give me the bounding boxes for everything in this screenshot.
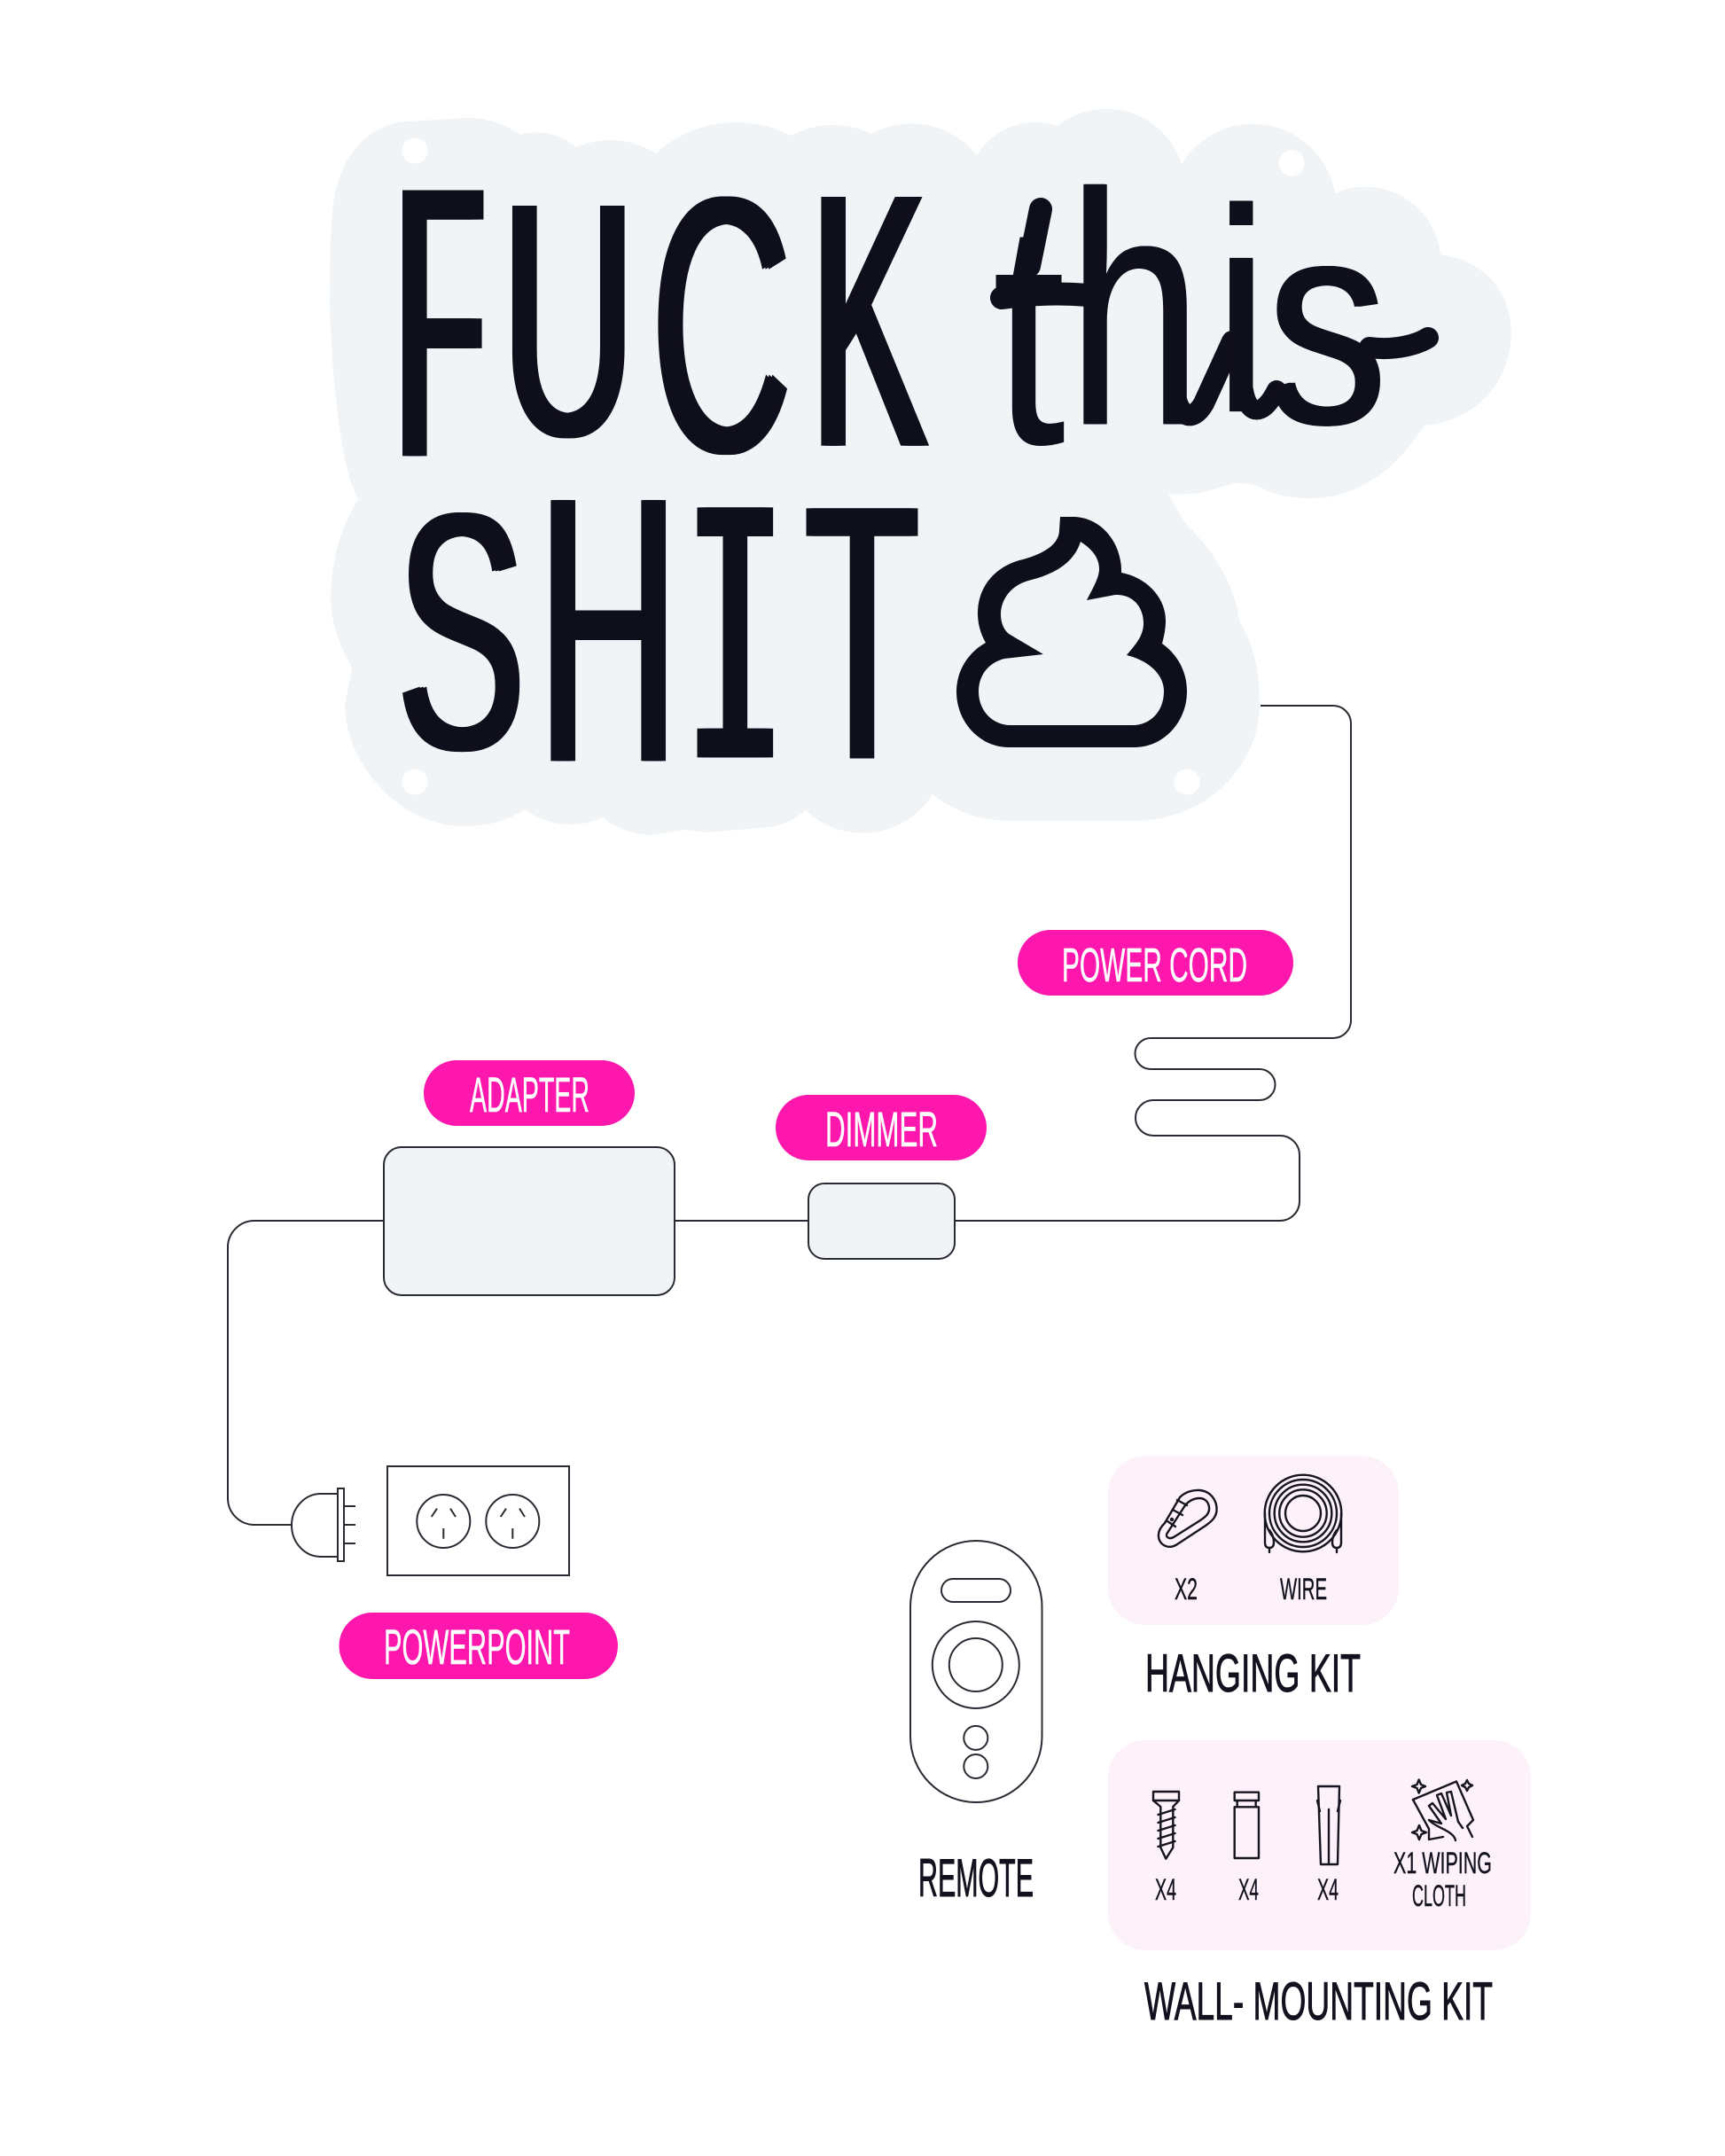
panel: wall-mounting kit: [1108, 1740, 1531, 1950]
title: sign lettering: [396, 106, 1386, 872]
dimmer box: [808, 1183, 955, 1259]
label: screw quantity: X4: [1155, 1873, 1176, 1907]
label: dimmer: [776, 1095, 987, 1160]
label: wiping cloth: X1 WIPING: [1393, 1847, 1492, 1880]
label: wall plug quantity: X4: [1317, 1873, 1339, 1907]
title: sign lettering: C: [652, 121, 791, 529]
title: sign lettering: K: [811, 118, 927, 522]
title: sign lettering: s: [1268, 158, 1386, 486]
heading: hanging kit: HANGING KIT: [1145, 1644, 1361, 1703]
title: sign lettering: T: [806, 429, 918, 836]
power cord line: [955, 706, 1351, 1221]
title: sign lettering: H: [538, 418, 678, 841]
icon: remote: [910, 1541, 1042, 1802]
cable from adapter to plug: [228, 1221, 384, 1525]
label: remote: REMOTE: [918, 1848, 1034, 1908]
title: sign lettering: F: [396, 106, 484, 538]
label: powerpoint: [339, 1613, 618, 1679]
sign backing panel: [330, 109, 1511, 835]
heading: wall-mounting kit: WALL- MOUNTING KIT: [1144, 1972, 1493, 2031]
label: adapter: [424, 1060, 635, 1126]
title: sign lettering: S: [397, 442, 525, 821]
icon: carabiner: [1159, 1490, 1217, 1547]
label: power cord: POWER CORD: [1062, 939, 1247, 992]
icon: plug: [292, 1488, 355, 1561]
label: spacer quantity: X4: [1238, 1873, 1259, 1907]
label: wiping cloth: CLOTH: [1412, 1879, 1466, 1913]
icon: screw: [1153, 1792, 1179, 1859]
icon: spacer: [1235, 1793, 1259, 1858]
label: powerpoint: POWERPOINT: [384, 1619, 570, 1675]
icon: wiping cloth: [1412, 1780, 1473, 1840]
icon: wall plug: [1317, 1786, 1340, 1864]
title flourishes: t crossbar, t ascender, h and i joins, s tail: [1002, 209, 1428, 415]
label: power cord: [1018, 930, 1293, 996]
title: sign lettering: t: [992, 155, 1065, 512]
title: sign lettering: h: [1067, 125, 1200, 495]
adapter box: [384, 1147, 675, 1295]
icon: wire coil: [1265, 1475, 1341, 1552]
panel: hanging kit: [1108, 1456, 1399, 1625]
icon: powerpoint socket: [387, 1466, 569, 1575]
title: sign lettering: U: [502, 133, 636, 505]
label: wire: WIRE: [1280, 1573, 1327, 1606]
label: dimmer: DIMMER: [825, 1101, 938, 1157]
cable between adapter and dimmer: [675, 1220, 808, 1222]
label: adapter: ADAPTER: [470, 1066, 589, 1122]
title: sign lettering: i: [1212, 149, 1271, 473]
label: x2: X2: [1175, 1573, 1198, 1606]
label: wiping cloth: [1393, 1847, 1492, 1913]
title: sign lettering: I: [685, 442, 785, 872]
icon: poop outline: [956, 517, 1187, 747]
